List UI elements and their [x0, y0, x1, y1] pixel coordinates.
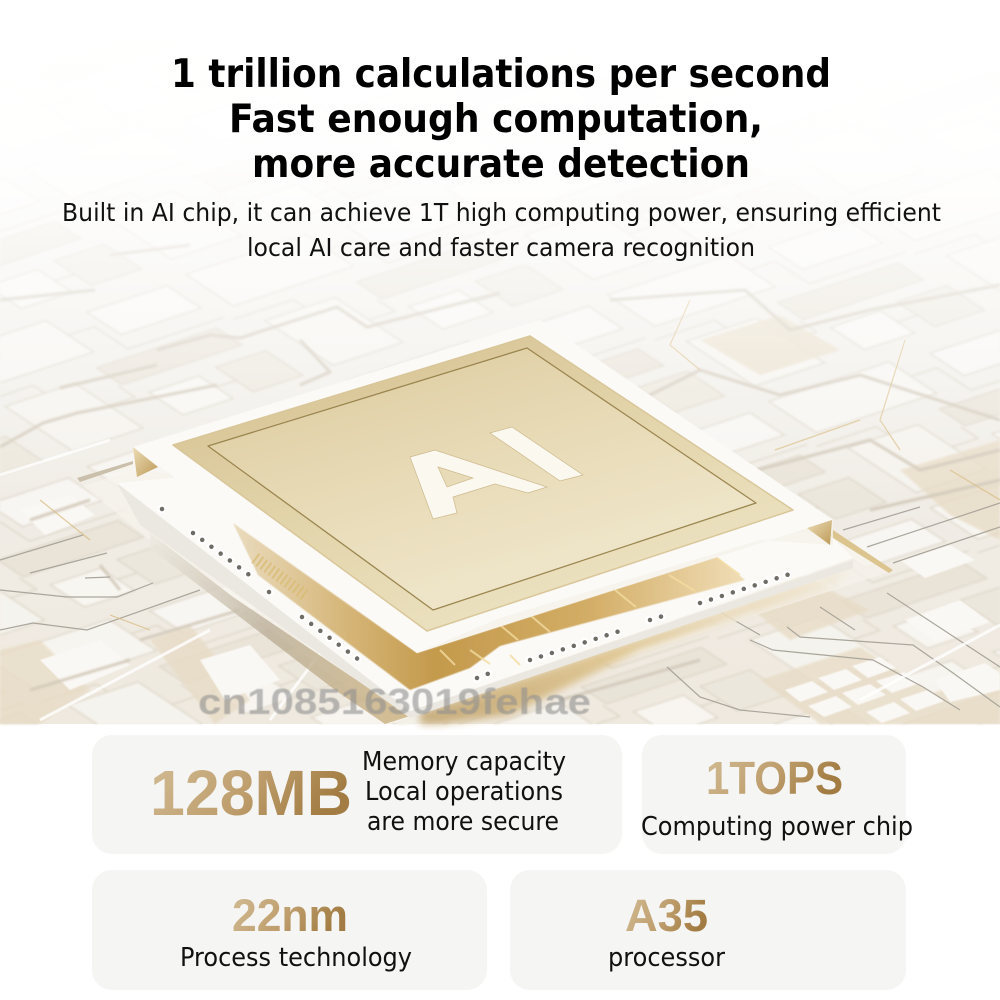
panel: A35 processor: [510, 870, 906, 990]
title: 1 trillion calculations per second: [171, 52, 831, 97]
chip: lower board: [117, 470, 853, 718]
background: circuit board image: [0, 0, 1000, 724]
panel: 1TOPS computing power: [641, 735, 913, 854]
chip: plate edge: [417, 520, 833, 653]
chip: under-board band right: [420, 567, 853, 724]
subtitle: [62, 198, 941, 262]
title: Fast enough computation,: [229, 97, 763, 142]
panel: 22nm process: [92, 870, 487, 990]
panel: 128MB memory: [92, 735, 622, 854]
stat: A35: A35: [625, 890, 708, 941]
board: pale keys lower right: [20, 495, 1000, 723]
text: memory description: [362, 747, 566, 837]
watermark: cn1085163019fehae: [198, 681, 591, 722]
text: computing power chip: Computing power chip: [641, 812, 913, 842]
chip: inner lid: [208, 348, 756, 610]
chip: gold corner notches: [133, 447, 832, 545]
text: processor: processor: [608, 943, 725, 973]
text: process technology: Process technology: [180, 943, 412, 973]
chip: white top plate: [133, 320, 833, 653]
chip: glass slab: [77, 461, 893, 726]
chip: underside highlights: [440, 558, 740, 665]
board: warm trace patches: [0, 315, 1000, 724]
chip: under-board band left: [150, 533, 410, 724]
chip: gold lid: [173, 336, 793, 631]
subtitle: Built in AI chip, it can achieve 1T high computing power, ensuring efficient: [62, 198, 941, 227]
chip: AI lettering: [410, 427, 583, 519]
stat: 1TOPS: 1TOPS: [706, 752, 843, 804]
title: [171, 52, 831, 187]
board: thin grey traces: [0, 503, 1000, 717]
board: white traces: [0, 440, 1000, 720]
stat: 22nm: 22nm: [232, 890, 348, 941]
text: memory description: are more secure: [367, 807, 559, 837]
board: gold traces: [40, 300, 1000, 630]
stat: 128MB: 128MB: [150, 757, 352, 829]
subtitle: local AI care and faster camera recognition: [247, 233, 755, 262]
text: memory description: Local operations: [365, 777, 563, 807]
chip: underside solder grid: [255, 558, 305, 595]
board: beige traces: [0, 245, 1000, 700]
chip: contact dots: [162, 509, 790, 678]
chip: gold underside: [233, 523, 745, 690]
text: memory description: Memory capacity: [362, 747, 566, 777]
AI chip illustration: [77, 320, 893, 726]
title: more accurate detection: [252, 142, 750, 187]
